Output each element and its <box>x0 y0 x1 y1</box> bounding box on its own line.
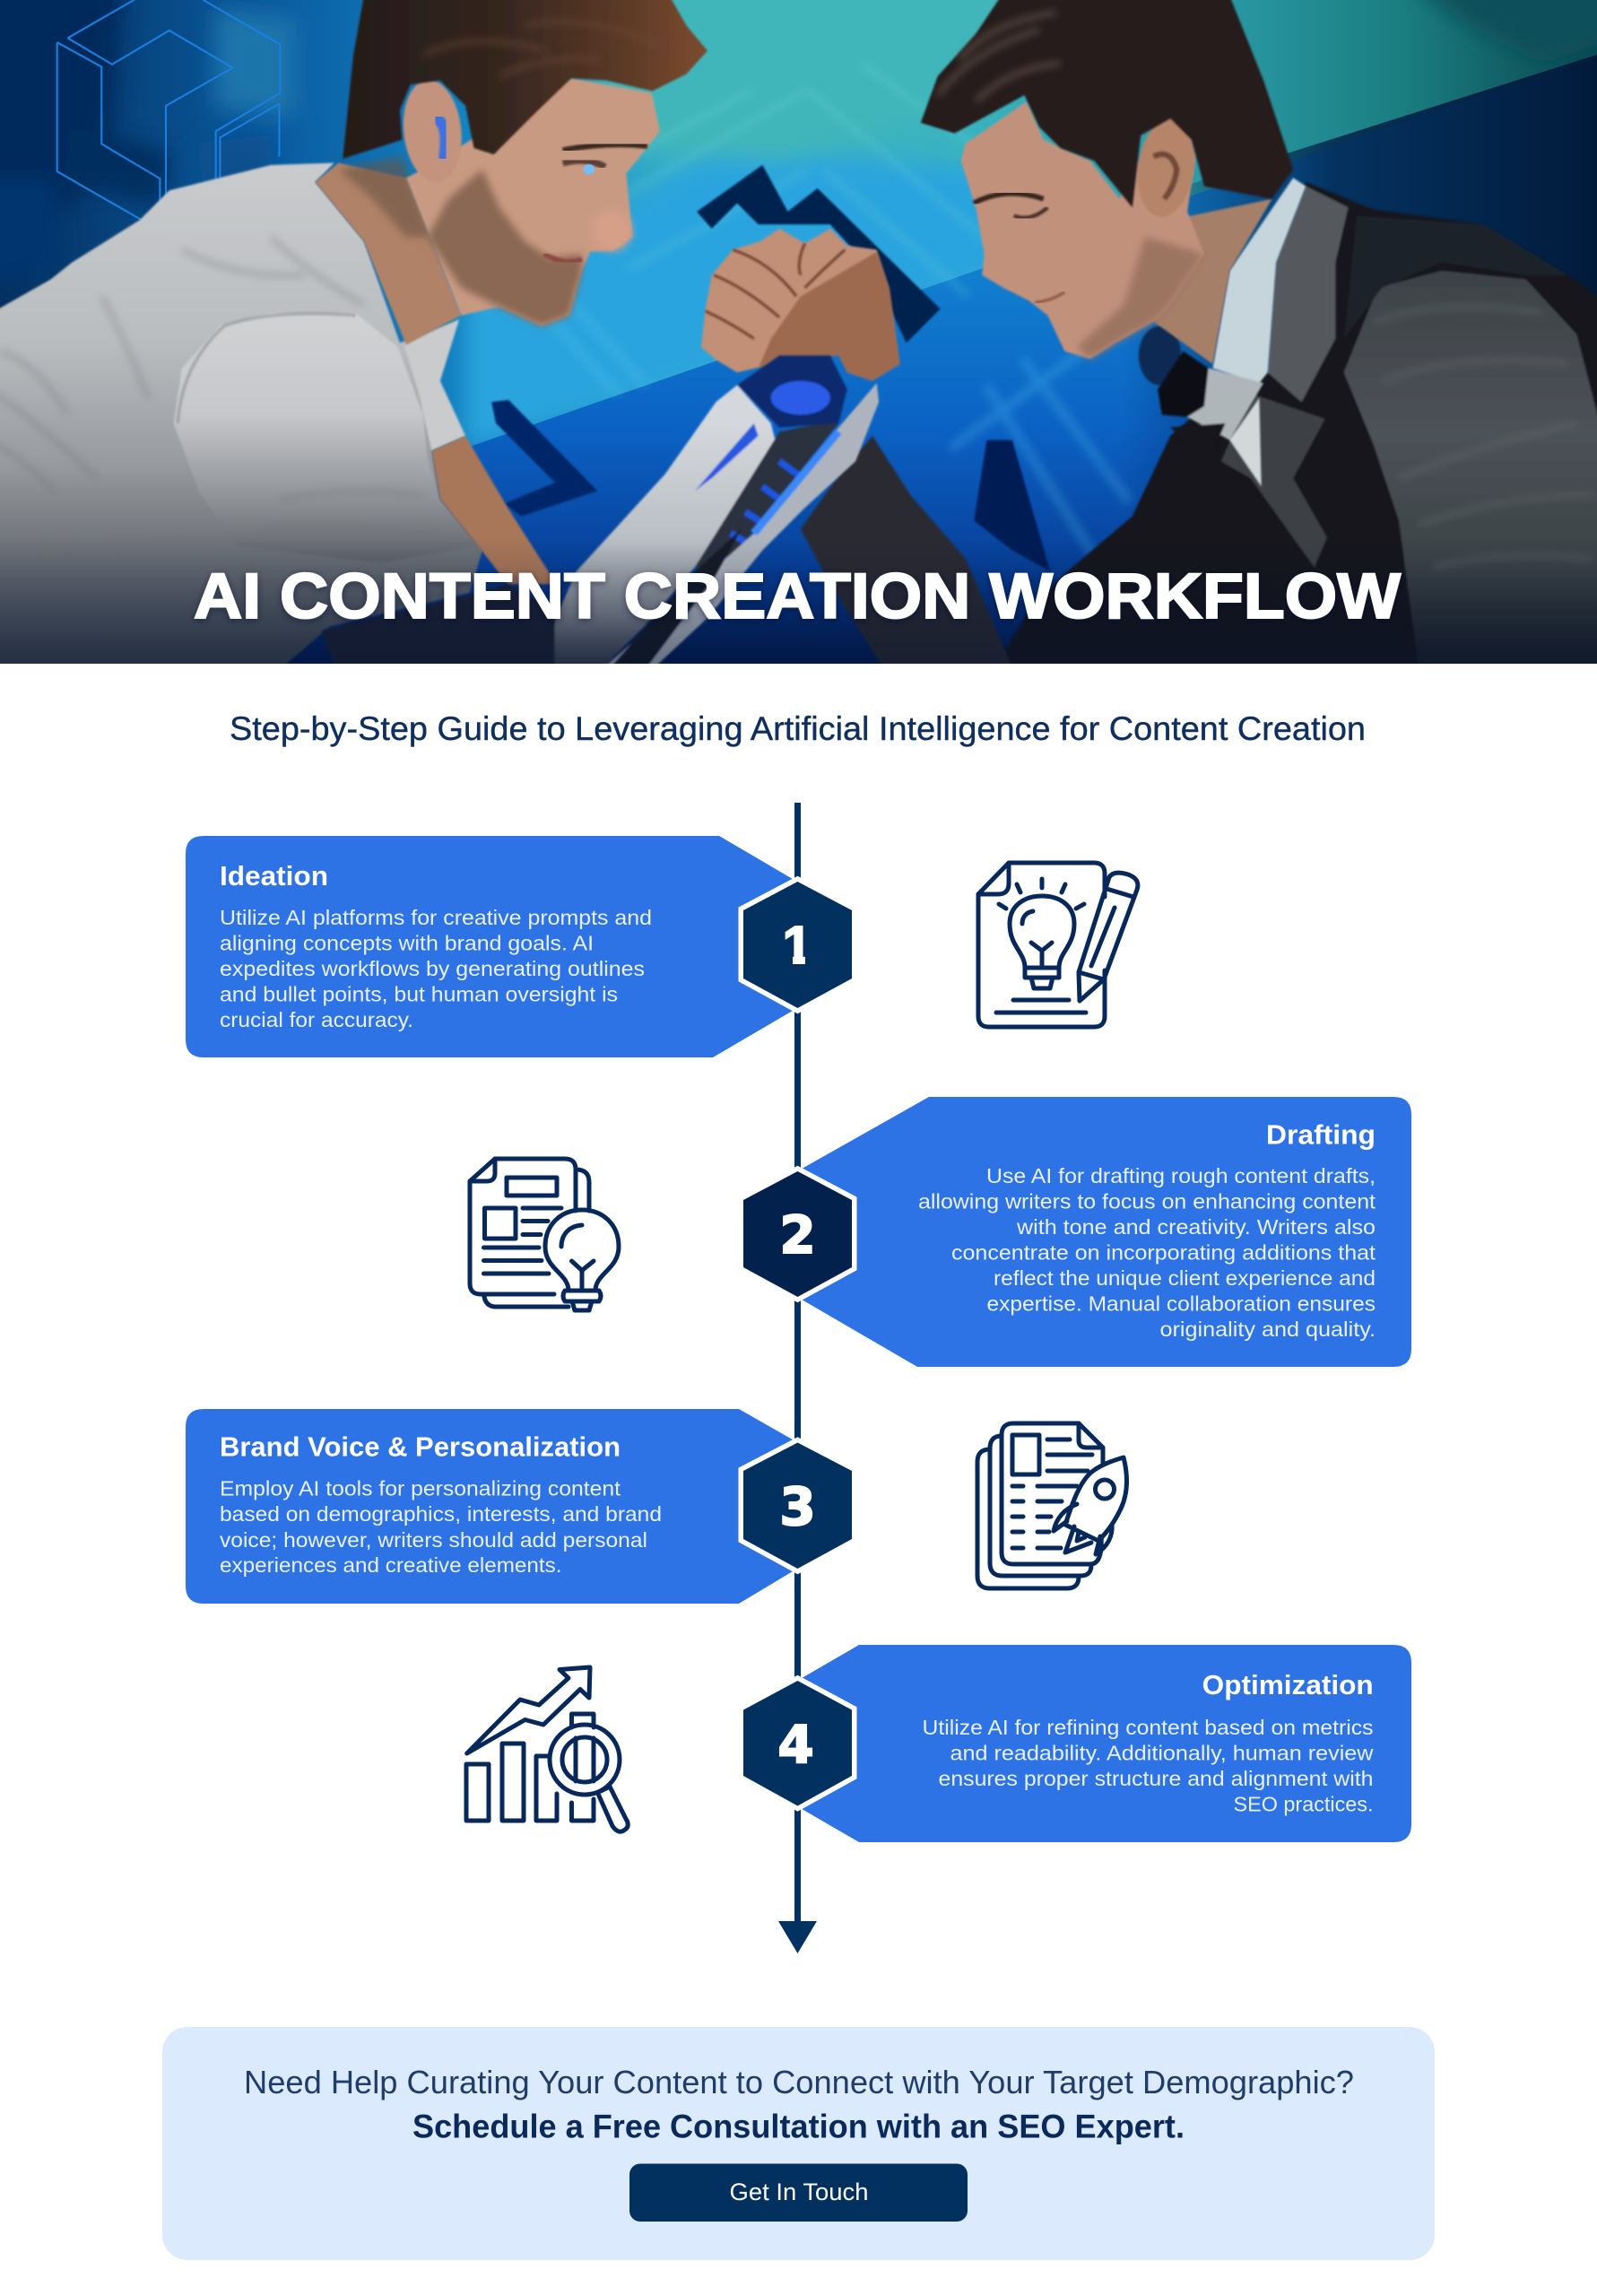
step 2 body text: allowing writers to focus on enhancing content <box>918 1189 1376 1213</box>
step 1 body text <box>220 906 652 1031</box>
step 4 heading: Optimization <box>1202 1669 1374 1700</box>
right man's hair <box>921 0 1293 207</box>
number hexagon 2: 2 <box>779 1205 816 1265</box>
step 3 body text <box>220 1477 662 1577</box>
number hexagon 1 <box>743 882 852 1008</box>
step 4 body text <box>922 1716 1374 1816</box>
step 2 body text: expertise. Manual collaboration ensures <box>986 1292 1376 1316</box>
number hexagon 4: 4 <box>777 1714 814 1775</box>
call to action bold line: Schedule a Free Consultation with an SEO Expert. <box>412 2108 1185 2145</box>
right man's sleeve <box>801 436 1016 677</box>
step 3 body text: voice; however, writers should add personal <box>220 1528 647 1552</box>
clasped hands <box>701 229 900 381</box>
icon: document with light bulb and pencil <box>978 863 1138 1027</box>
step 3 body text: Employ AI tools for personalizing content <box>220 1477 621 1500</box>
step 1 body text: expedites workflows by generating outlines <box>220 957 645 980</box>
right man's ear <box>1137 118 1196 217</box>
icon: stacked documents with rocket <box>977 1423 1126 1588</box>
step 4 body text: and readability. Additionally, human review <box>950 1742 1374 1765</box>
hero image: man and robot-armed man arm wrestling <box>0 0 1597 682</box>
panel: step 1 ideation <box>186 836 797 1057</box>
left man <box>0 0 707 677</box>
left man's face <box>406 78 660 326</box>
step 2 body text <box>918 1164 1376 1341</box>
left man's hair <box>343 0 707 159</box>
step 2 body text: Use AI for drafting rough content drafts, <box>986 1164 1376 1187</box>
step 1 body text: crucial for accuracy. <box>220 1008 413 1031</box>
step 4 body text: SEO practices. <box>1234 1793 1374 1816</box>
button: get in touch: Get In Touch <box>730 2179 868 2205</box>
panel: step 3 brand voice and personalization <box>186 1409 797 1604</box>
left man's shirt <box>0 163 482 677</box>
left man's neck <box>316 163 461 345</box>
number hexagon 1: 1 <box>783 916 812 975</box>
number hexagon 3 <box>743 1442 852 1569</box>
step 3 heading: Brand Voice & Personalization <box>220 1431 621 1462</box>
step 4 body text: ensures proper structure and alignment with <box>938 1767 1374 1790</box>
button: get in touch <box>629 2163 968 2222</box>
number hexagon 2 <box>743 1171 852 1297</box>
title: AI CONTENT CREATION WORKFLOW <box>194 561 1401 632</box>
dark shape behind collar <box>1139 326 1181 385</box>
step 1 body text: Utilize AI platforms for creative prompts and <box>220 906 652 929</box>
step 2 heading: Drafting <box>1266 1119 1376 1150</box>
number hexagon 3: 3 <box>779 1476 816 1537</box>
right man's jacket <box>988 182 1597 677</box>
center: arms and hands <box>530 229 1016 677</box>
bottom dark fade <box>0 553 1597 664</box>
subtitle: Step-by-Step Guide to Leveraging Artificial Intelligence for Content Creation <box>230 710 1366 747</box>
step 3 body text: based on demographics, interests, and brand <box>220 1502 662 1526</box>
step 2 body text: reflect the unique client experience and <box>994 1266 1376 1290</box>
call to action text line: Need Help Curating Your Content to Connect with Your Target Demographic? <box>244 2064 1354 2100</box>
step 4 body text: Utilize AI for refining content based on metrics <box>922 1716 1374 1739</box>
step 2 body text: originality and quality. <box>1160 1318 1376 1341</box>
step 1 body text: and bullet points, but human oversight is <box>220 983 618 1006</box>
left man's ear <box>402 81 463 173</box>
step 1 heading: Ideation <box>220 860 328 891</box>
step 1 body text: aligning concepts with brand goals. AI <box>220 931 594 954</box>
icon: newspaper with light bulb <box>470 1159 619 1310</box>
right man's shirt collar <box>1158 178 1306 487</box>
panel: call to action <box>162 2027 1435 2260</box>
hero background: geometric blue and teal shapes <box>0 0 1597 682</box>
robot arm base near shirt <box>321 583 556 664</box>
left man's forearm <box>431 436 557 584</box>
robot arm <box>530 355 879 677</box>
step 2 body text: with tone and creativity. Writers also <box>1016 1215 1376 1239</box>
hero background: dark chevrons <box>491 165 1050 571</box>
right man's face and neck <box>961 101 1272 364</box>
hero background: wireframe cube lines <box>57 0 280 220</box>
step 3 body text: experiences and creative elements. <box>220 1553 561 1577</box>
icon: bar chart with rising arrow and magnifier <box>466 1667 628 1831</box>
number hexagon 4 <box>743 1681 852 1806</box>
timeline arrow <box>778 803 817 1953</box>
panel: step 4 optimization <box>797 1645 1411 1842</box>
panel: step 2 drafting <box>797 1097 1411 1367</box>
right man <box>921 0 1597 677</box>
step 2 body text: concentrate on incorporating additions that <box>951 1241 1376 1265</box>
